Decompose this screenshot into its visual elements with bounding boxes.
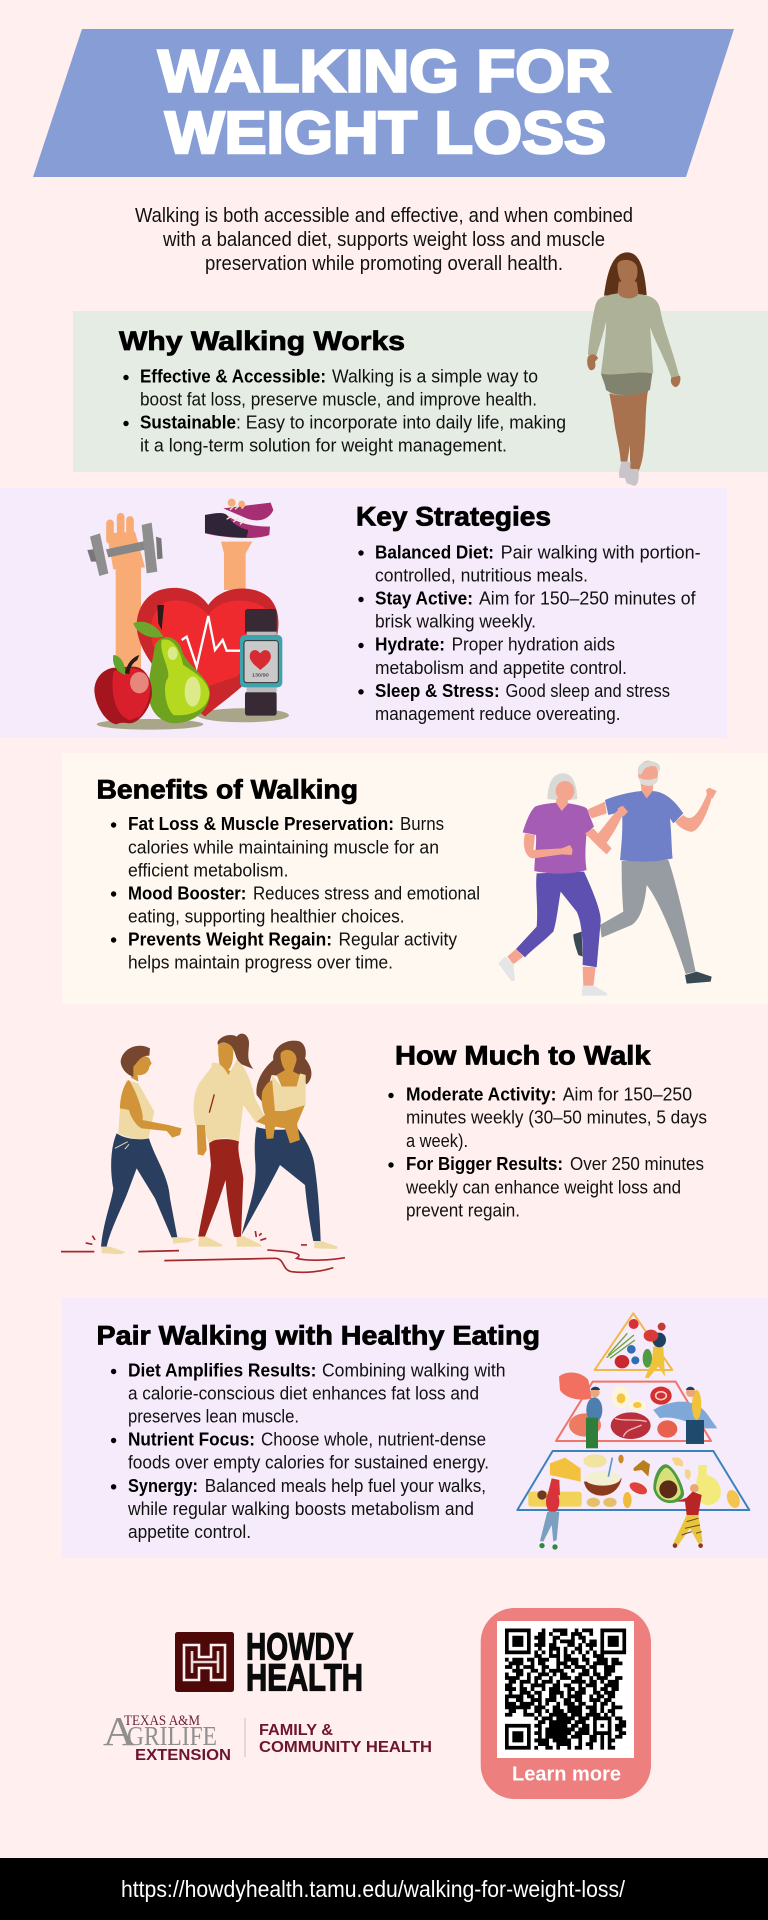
bullet list: benefits: Prevents Weight Regain:: [128, 929, 332, 949]
illustration: heart, fruit, dumbbell, shoes and watch: [87, 499, 289, 730]
bullet list: how much to walk: [388, 1085, 707, 1220]
panel: benefits of walking: [62, 753, 768, 1004]
illustration: walking woman: [587, 252, 680, 486]
intro text: with a balanced diet, supports weight loss and muscle: [162, 228, 605, 251]
bullet list: key strategies: metabolism and appetite control.: [375, 658, 627, 678]
bullet list: how much to walk: For Bigger Results:: [406, 1154, 563, 1174]
bullet list: why walking works: Walking is a simple way to: [332, 367, 538, 387]
heading and list: how much to walk: [388, 1040, 707, 1220]
logo: Texas A&M AgriLife Extension: COMMUNITY HEALTH: [259, 1739, 432, 1756]
bullet list: why walking works: it a long-term solution for weight management.: [140, 436, 507, 456]
bullet list: key strategies: Good sleep and stress: [506, 681, 670, 701]
bullet list: key strategies: management reduce overeating.: [375, 704, 620, 724]
bullet list: pair walking: foods over empty calories for sustained energy.: [128, 1453, 489, 1473]
title banner: WEIGHT LOSS: [165, 100, 606, 166]
logo: Howdy Health: HOWDY: [246, 1626, 354, 1668]
bullet list: benefits: Mood Booster:: [128, 883, 246, 903]
panel: pair walking with healthy eating: [62, 1298, 768, 1558]
QR caption: Learn more: [512, 1764, 621, 1786]
bullet list: benefits: helps maintain progress over time.: [128, 952, 393, 972]
bullet list: benefits: calories while maintaining muscle for an: [128, 837, 439, 857]
illustration: older couple walking: [498, 761, 717, 996]
bullet list: key strategies: Sleep & Stress:: [375, 681, 500, 701]
bullet list: pair walking: a calorie-conscious diet enhances fat loss and: [128, 1384, 479, 1404]
bullet list: pair walking: while regular walking boosts metabolism and: [127, 1499, 474, 1519]
logo: Texas A&M AgriLife Extension: GRILIFE: [127, 1721, 217, 1751]
bullet list: how much to walk: Over 250 minutes: [570, 1154, 704, 1174]
heading: key strategies: Key Strategies: [356, 501, 551, 531]
bullet list: pair walking: appetite control.: [128, 1522, 251, 1542]
logo: Texas A&M AgriLife Extension: EXTENSION: [135, 1747, 231, 1764]
panel: why walking works: [73, 311, 768, 472]
bullet list: key strategies: Stay Active:: [375, 589, 473, 609]
bullet list: key strategies: brisk walking weekly.: [375, 612, 536, 632]
bullet list: benefits: Fat Loss & Muscle Preservation:: [128, 814, 394, 834]
intro text: [135, 204, 633, 275]
intro text: preservation while promoting overall health.: [205, 252, 563, 275]
logo: Howdy Health: HEALTH: [246, 1658, 363, 1700]
bullet list: pair walking: Combining walking with: [322, 1361, 506, 1381]
bullet list: how much to walk: minutes weekly (30–50 minutes, 5 days: [406, 1108, 707, 1128]
logo: Texas A&M AgriLife Extension: FAMILY &: [259, 1722, 333, 1739]
bullet list: key strategies: controlled, nutritious meals.: [375, 566, 588, 586]
bullet list: why walking works: : Easy to incorporate into daily life, making: [236, 413, 566, 433]
bullet list: pair walking: Nutrient Focus:: [128, 1430, 255, 1450]
QR card: [481, 1608, 651, 1799]
heading: how much to walk: How Much to Walk: [395, 1040, 652, 1070]
bullet list: how much to walk: prevent regain.: [406, 1200, 520, 1220]
bullet list: key strategies: [358, 542, 701, 724]
logo: Howdy Health: [175, 1626, 363, 1700]
intro text: Walking is both accessible and effective, and when combined: [135, 204, 633, 227]
heading: benefits of walking: Benefits of Walking: [96, 774, 358, 804]
bullet list: benefits: Reduces stress and emotional: [253, 883, 480, 903]
bullet list: pair walking: Synergy:: [128, 1476, 198, 1496]
logo: Texas A&M AgriLife Extension: A: [103, 1708, 135, 1754]
heading: why walking works: Why Walking Works: [119, 326, 405, 356]
bullet list: pair walking: Diet Amplifies Results:: [128, 1361, 316, 1381]
bullet list: how much to walk: Moderate Activity:: [406, 1085, 556, 1105]
bullet list: how much to walk: weekly can enhance weight loss and: [405, 1177, 681, 1197]
bullet list: key strategies: Aim for 150–250 minutes of: [479, 589, 696, 609]
bullet list: how much to walk: Aim for 150–250: [563, 1085, 692, 1105]
bullet list: why walking works: Sustainable: [140, 413, 236, 433]
logo: Texas A&M AgriLife Extension: TEXAS A&M: [124, 1713, 200, 1729]
bullet list: key strategies: Proper hydration aids: [452, 635, 615, 655]
bullet list: why walking works: [123, 367, 566, 456]
illustration: heart, fruit, dumbbell, shoes and watch: 130/90: [252, 672, 269, 678]
bullet list: pair walking: Choose whole, nutrient-dense: [261, 1430, 486, 1450]
panel: key strategies: [0, 488, 727, 738]
bullet list: pair walking: preserves lean muscle.: [128, 1407, 299, 1427]
illustration: three women walking: [61, 1034, 345, 1272]
heading: pair walking with healthy eating: Pair Walking with Healthy Eating: [96, 1320, 540, 1350]
bullet list: why walking works: boost fat loss, preserve muscle, and improve health.: [140, 390, 537, 410]
bullet list: key strategies: Pair walking with portion-: [501, 542, 701, 562]
bullet list: pair walking: [111, 1361, 506, 1542]
bullet list: why walking works: Effective & Accessible:: [140, 367, 326, 387]
title banner: [33, 29, 734, 177]
illustration: food pyramid: [517, 1313, 749, 1550]
bullet list: benefits: eating, supporting healthier choices.: [128, 906, 405, 926]
bullet list: benefits: Regular activity: [338, 929, 457, 949]
bullet list: benefits: Burns: [400, 814, 444, 834]
footer bar with URL: [0, 1858, 768, 1920]
logo: Texas A&M AgriLife Extension: [103, 1708, 432, 1764]
bullet list: benefits: efficient metabolism.: [128, 860, 288, 880]
bullet list: key strategies: Hydrate:: [375, 635, 445, 655]
bullet list: how much to walk: a week).: [406, 1131, 468, 1151]
bullet list: benefits: [111, 814, 480, 972]
title banner: WALKING FOR: [158, 38, 611, 104]
bullet list: pair walking: Balanced meals help fuel your walks,: [205, 1476, 486, 1496]
footer bar with URL: https://howdyhealth.tamu.edu/walking-for-weight-loss/: [121, 1876, 626, 1902]
bullet list: key strategies: Balanced Diet:: [375, 542, 494, 562]
QR code: [505, 1630, 626, 1748]
